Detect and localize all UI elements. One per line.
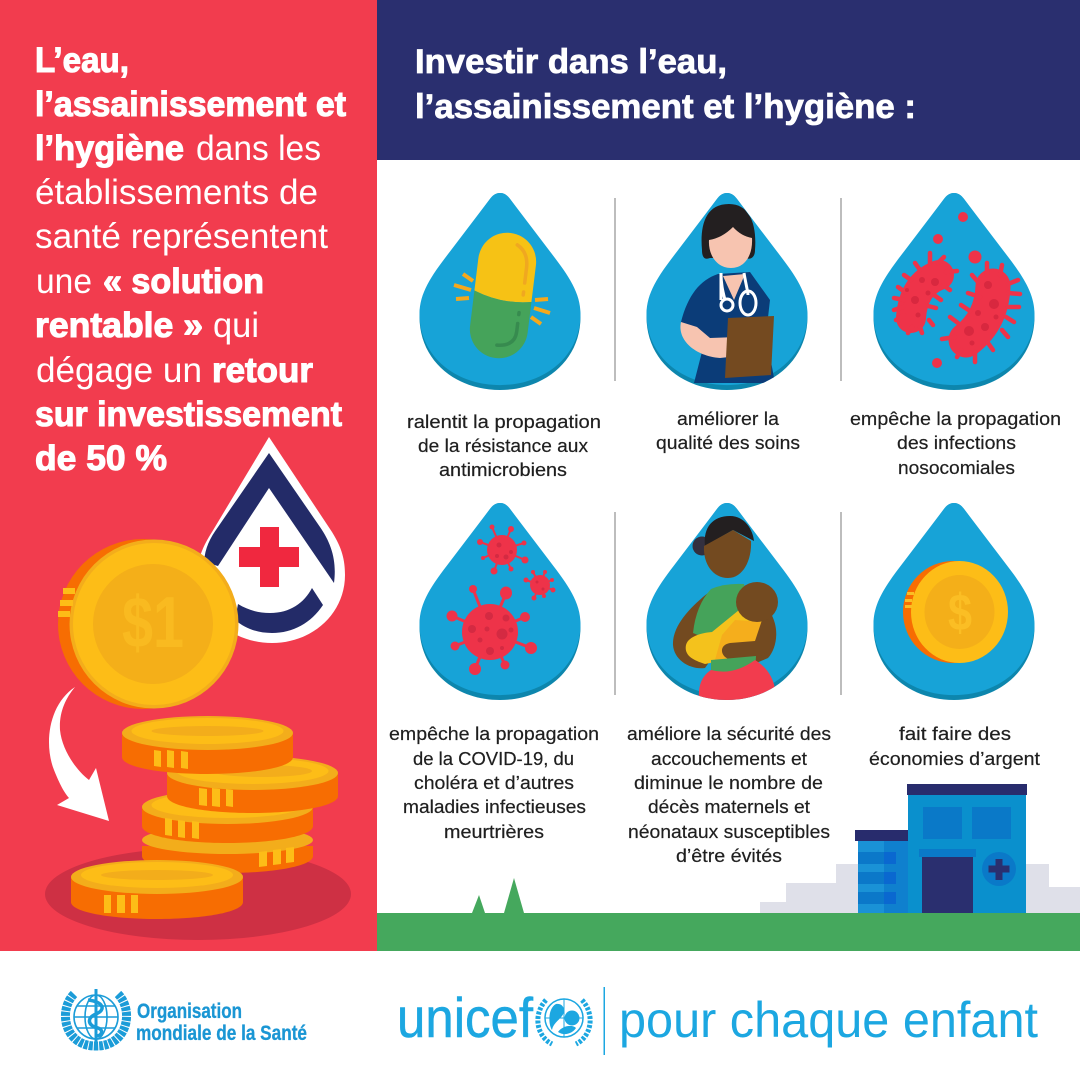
text: hospital infections caption: nosocomiales — [898, 458, 1015, 478]
logo: WHO emblem — [65, 989, 127, 1046]
header title — [415, 43, 916, 126]
text: safe childbirth caption: décès maternels et — [648, 797, 810, 817]
left panel statement text: dans les — [196, 129, 321, 168]
icon: capsule in drop — [420, 193, 580, 390]
scene: trees — [472, 878, 524, 913]
text: safe childbirth caption: améliore la sécurité des — [627, 724, 831, 744]
text: antimicrobial resistance caption: antimicrobiens — [439, 460, 567, 480]
scene: background steps — [760, 864, 1080, 913]
text: quality of care caption — [656, 409, 800, 453]
text: antimicrobial resistance caption: ralentit la propagation — [407, 412, 601, 432]
left panel statement text — [35, 41, 346, 478]
arrow: curved white arrow — [49, 687, 109, 821]
icon: mother and baby in drop — [646, 503, 808, 700]
text: hospital infections caption: des infections — [897, 433, 1016, 453]
logo: unicef wordmark: unicef — [397, 986, 533, 1049]
text: quality of care caption: améliorer la — [677, 409, 780, 429]
text: WHO name — [136, 1000, 307, 1045]
left panel statement text: établissements de — [35, 173, 318, 212]
left panel statement text: rentable » — [35, 306, 203, 345]
icon: viruses in drop — [420, 503, 580, 700]
scene: green ground — [377, 913, 1080, 951]
left panel statement text: l’assainissement et — [35, 85, 346, 124]
left panel statement text: dégage un — [36, 351, 202, 390]
left panel statement text: de 50 % — [35, 439, 167, 478]
text: safe childbirth caption: d’être évités — [676, 846, 782, 866]
shadow under coins — [45, 848, 351, 940]
icon: stack of coins — [71, 716, 338, 919]
left panel statement text: « solution — [103, 262, 264, 301]
logo: unicef emblem — [538, 999, 590, 1044]
header title: l’assainissement et l’hygiène : — [415, 88, 916, 126]
icon: nurse in drop — [646, 193, 808, 390]
icon: coin in drop — [874, 503, 1034, 700]
text: safe childbirth caption — [627, 724, 831, 866]
left panel statement text: sur investissement — [35, 395, 342, 434]
text: hospital infections caption: empêche la propagation — [850, 409, 1061, 429]
text: COVID-19 caption: empêche la propagation — [389, 724, 599, 744]
icon: health drop logo — [197, 437, 345, 643]
text: quality of care caption: qualité des soins — [656, 433, 800, 453]
text: WHO name: mondiale de la Santé — [136, 1022, 307, 1045]
text: hospital infections caption — [850, 409, 1061, 478]
left panel statement text: L’eau, — [35, 41, 129, 80]
left panel statement text: santé représentent — [35, 217, 328, 256]
panel: left red panel — [0, 0, 377, 951]
text: antimicrobial resistance caption — [407, 412, 601, 480]
text: money savings caption: fait faire des — [899, 724, 1011, 744]
icon: hospital building — [855, 784, 1027, 913]
left panel statement text: l’hygiène — [35, 129, 184, 168]
icon: bacteria in drop — [874, 193, 1034, 390]
text: COVID-19 caption: maladies infectieuses — [403, 797, 586, 817]
text: COVID-19 caption: choléra et d’autres — [414, 773, 574, 793]
text: WHO name: Organisation — [137, 1000, 242, 1023]
text: safe childbirth caption: néonataux susceptibles — [628, 822, 830, 842]
text: money savings caption — [869, 724, 1040, 769]
text: antimicrobial resistance caption: de la résistance aux — [418, 436, 588, 456]
left panel statement text: retour — [212, 351, 313, 390]
left panel statement text: une — [36, 262, 92, 301]
icon: large gold coin — [58, 539, 238, 709]
text: COVID-19 caption: meurtrières — [444, 822, 544, 842]
icon: large gold coin: $1 — [122, 583, 184, 663]
text: safe childbirth caption: diminue le nombre de — [634, 773, 823, 793]
text: money savings caption: économies d’argent — [869, 749, 1040, 769]
logo divider — [604, 987, 605, 1055]
left panel statement text: qui — [213, 306, 259, 345]
icon: coin in drop: $ — [948, 584, 972, 642]
text: safe childbirth caption: accouchements et — [651, 749, 807, 769]
logo: unicef slogan: pour chaque enfant — [619, 992, 1038, 1048]
text: COVID-19 caption — [389, 724, 599, 842]
panel: header band — [377, 0, 1080, 160]
header title: Investir dans l’eau, — [415, 43, 727, 81]
text: COVID-19 caption: de la COVID-19, du — [413, 749, 574, 769]
